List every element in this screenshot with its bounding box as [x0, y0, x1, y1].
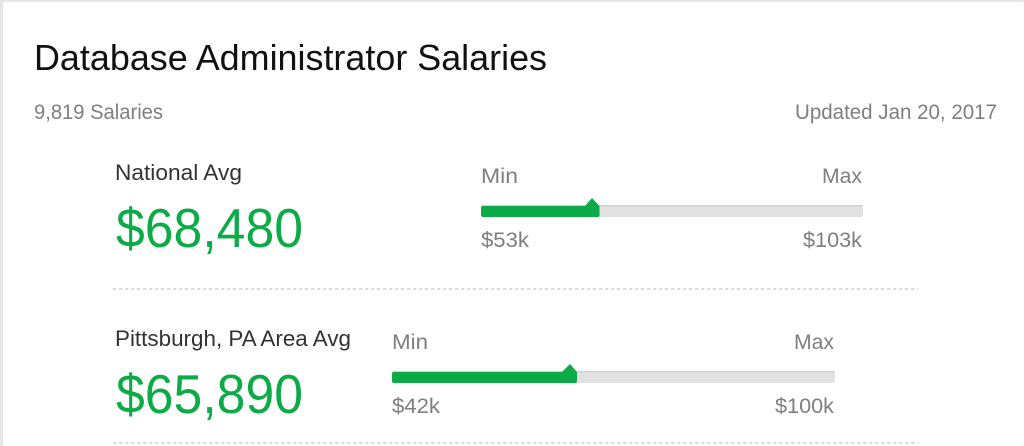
title: Database Administrator Salaries: [34, 37, 547, 78]
Pittsburgh max label: Max: [794, 331, 834, 354]
national range bar: [481, 198, 863, 217]
national min value: $53k: [481, 229, 530, 252]
national max value: $103k: [803, 229, 863, 252]
national max label: Max: [822, 165, 862, 188]
Pittsburgh min label: Min: [392, 331, 428, 354]
Pittsburgh min value: $42k: [392, 395, 441, 418]
salaries count: 9,819 Salaries: [34, 101, 163, 124]
panel: Pittsburgh average: [115, 326, 835, 425]
Pittsburgh average label: Pittsburgh, PA Area Avg: [115, 326, 351, 351]
national min label: Min: [481, 165, 518, 188]
panel: national average: [115, 160, 863, 259]
national average value: $68,480: [116, 197, 303, 259]
Pittsburgh average value: $65,890: [116, 363, 303, 425]
Pittsburgh range bar: [392, 364, 835, 383]
Pittsburgh max value: $100k: [775, 395, 835, 418]
updated date: Updated Jan 20, 2017: [795, 101, 997, 124]
national average label: National Avg: [115, 160, 242, 185]
